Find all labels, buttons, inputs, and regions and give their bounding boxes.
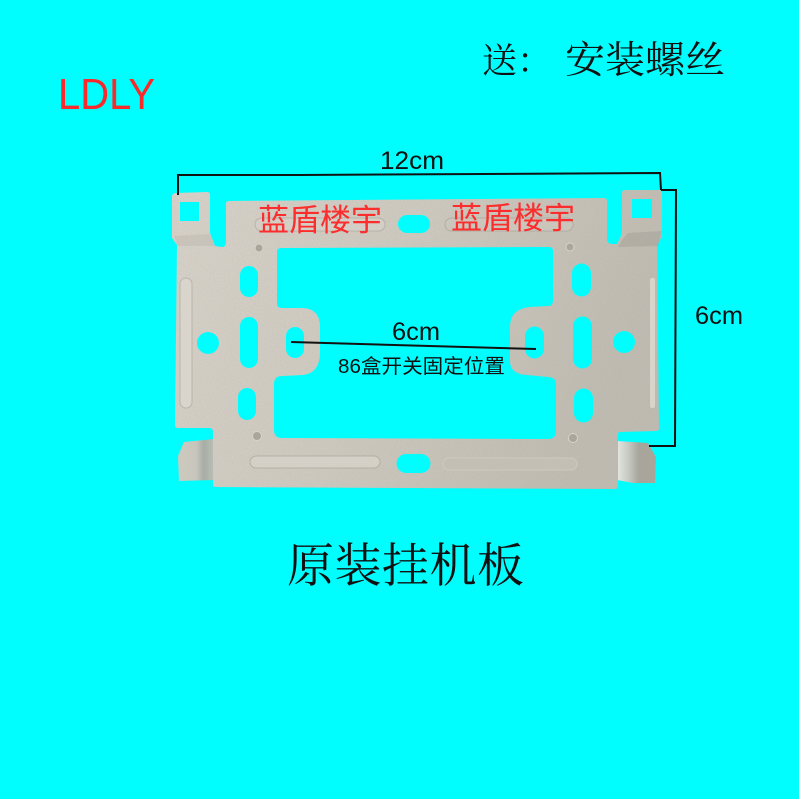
right clip fold shading <box>618 231 662 247</box>
switch position caption: 86盒开关固定位置 <box>338 355 505 378</box>
red watermark left: 蓝盾楼宇 <box>258 203 382 238</box>
gift label: 送： <box>482 42 552 81</box>
mounting plate <box>172 190 662 489</box>
embossed rib: bottom left <box>250 456 380 468</box>
embossed rib: right <box>650 278 655 408</box>
12cm width dimension <box>178 147 661 195</box>
embossed rib: top right <box>445 218 573 231</box>
brand logo text: LDLY <box>58 70 155 119</box>
product title: 原装挂机板 <box>287 541 524 593</box>
12cm bracket line <box>178 173 661 195</box>
embossed rib: left <box>180 278 192 408</box>
6cm switch box spacing dimension <box>291 318 536 378</box>
gift item: 安装螺丝 <box>565 40 725 82</box>
left clip fold shading <box>174 234 215 246</box>
embossed rib: bottom right <box>443 458 577 470</box>
bottom left bent clip <box>178 439 214 481</box>
12cm label: 12cm <box>380 147 444 175</box>
plate body with cut-outs <box>172 190 662 489</box>
bottom right bent clip <box>617 441 656 483</box>
height label: 6cm <box>695 302 743 330</box>
spacing label: 6cm <box>392 318 440 346</box>
height bracket line <box>649 190 676 446</box>
gift note: mounting screws <box>482 40 725 82</box>
dimples <box>252 243 578 442</box>
spacing line <box>291 342 536 349</box>
embossed rib: top left <box>255 218 385 231</box>
red watermark right: 蓝盾楼宇 <box>451 201 575 236</box>
6cm height dimension <box>649 190 743 446</box>
